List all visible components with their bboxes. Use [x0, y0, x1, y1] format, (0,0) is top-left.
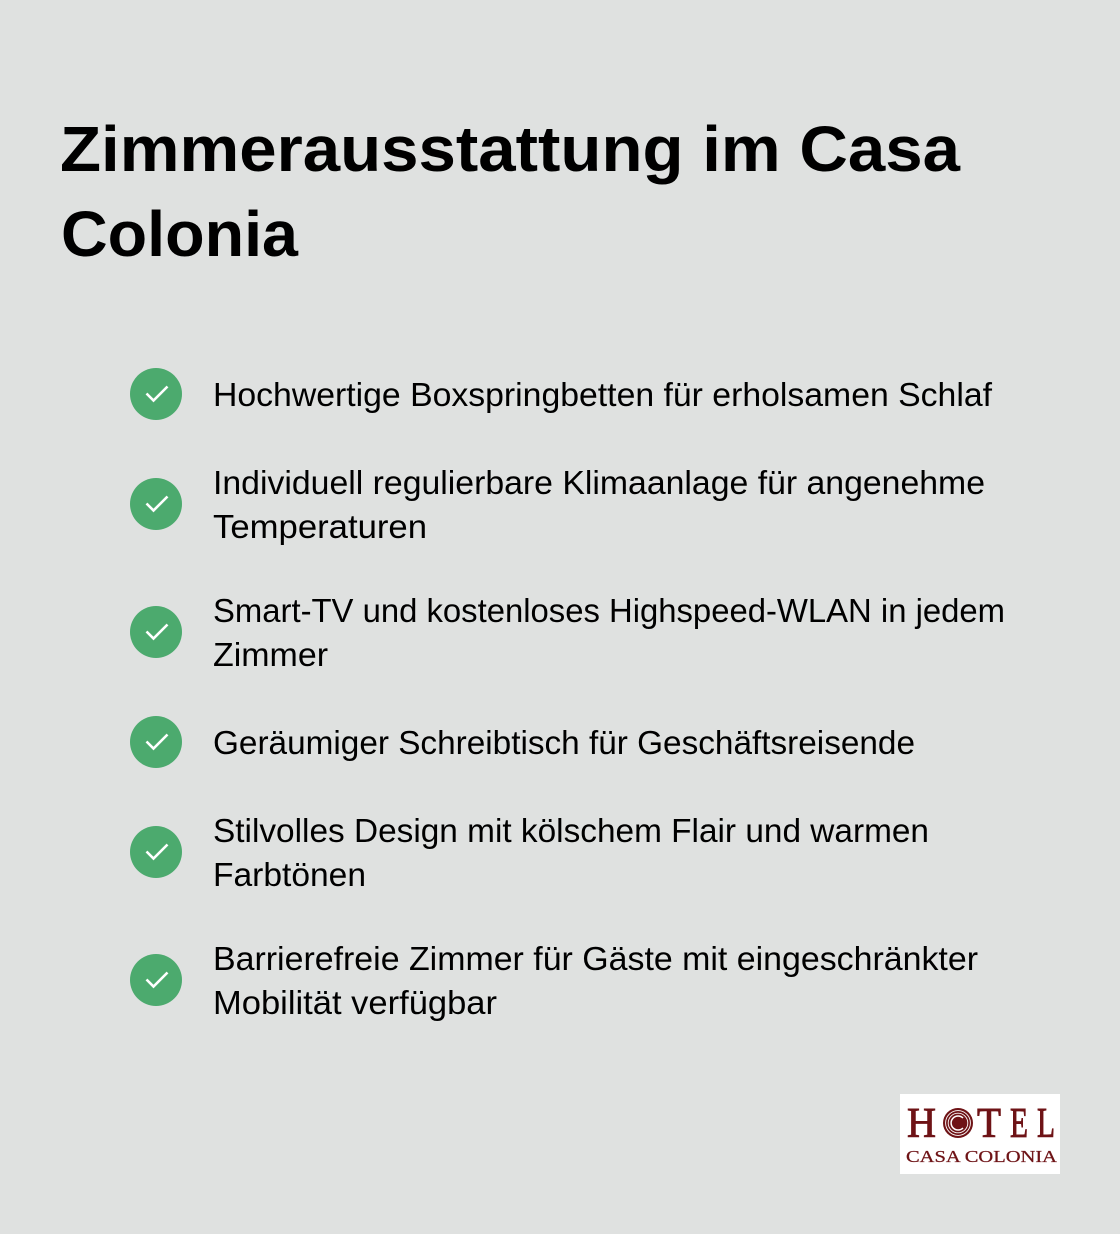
logo: Hotel Casa Colonia: T [977, 1101, 1001, 1147]
item: Design [130, 812, 929, 893]
logo: Hotel Casa Colonia: H [907, 1101, 936, 1147]
title: Zimmerausstattung im Casa [60, 113, 960, 185]
item: Smart-TV und WLAN: Zimmer [213, 636, 328, 673]
title [60, 113, 960, 270]
item: Klimaanlage: Individuell regulierbare Klimaanlage für angenehme [213, 464, 985, 501]
item: Schreibtisch [130, 716, 915, 768]
item: Barrierefrei [130, 940, 978, 1021]
item: Klimaanlage: Temperaturen [213, 508, 427, 545]
logo: Hotel Casa Colonia: L [1037, 1101, 1055, 1147]
item: Barrierefrei: Barrierefreie Zimmer für Gäste mit eingeschränkter [213, 940, 978, 977]
item: Barrierefrei: Mobilität verfügbar [213, 984, 497, 1021]
item: Design: Stilvolles Design mit kölschem Flair und warmen [213, 812, 929, 849]
checklist [130, 368, 1005, 1021]
logo: Hotel Casa Colonia: CASA COLONIA [906, 1147, 1058, 1166]
title: Colonia [61, 198, 298, 270]
item: Klimaanlage [130, 464, 985, 545]
item: Smart-TV und WLAN [130, 592, 1005, 673]
item: Boxspringbetten: Hochwertige Boxspringbetten für erholsamen Schlaf [213, 376, 993, 413]
item: Schreibtisch: Geräumiger Schreibtisch für Geschäftsreisende [213, 724, 915, 761]
logo: Hotel Casa Colonia [900, 1094, 1060, 1174]
item: Design: Farbtönen [213, 856, 366, 893]
item: Boxspringbetten [130, 368, 993, 420]
logo: Hotel Casa Colonia: E [1010, 1101, 1028, 1147]
item: Smart-TV und WLAN: Smart-TV und kostenloses Highspeed-WLAN in jedem [213, 592, 1005, 629]
